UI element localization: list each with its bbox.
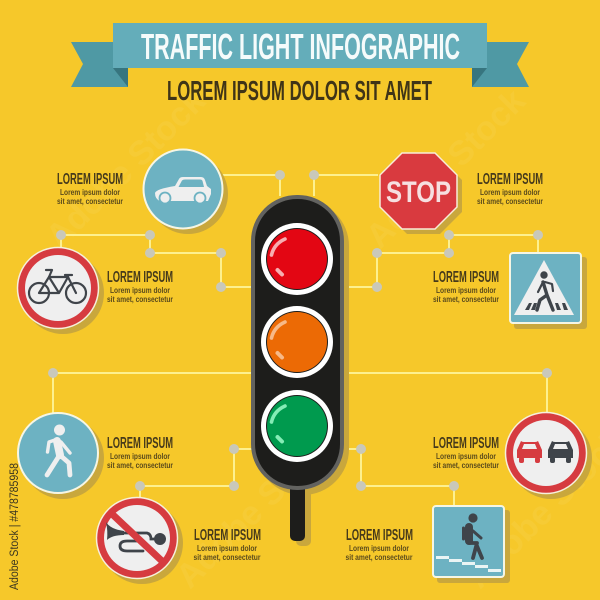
text: bicycle: LOREM IPSUM — [107, 269, 173, 286]
icon: stop sign — [380, 153, 462, 234]
connector lines — [48, 170, 552, 506]
text: car: Lorem ipsum dolor — [60, 188, 120, 197]
green light — [261, 390, 333, 462]
icon: stop sign: STOP — [386, 176, 451, 209]
text: stop — [477, 171, 543, 206]
text: crossing: LOREM IPSUM — [433, 269, 499, 286]
subtitle: LOREM IPSUM DOLOR SIT AMET — [167, 75, 432, 106]
text: car: sit amet, consectetur — [57, 197, 123, 206]
text: overtaking: LOREM IPSUM — [433, 435, 499, 452]
text: Adobe Stock — [359, 82, 533, 256]
text: crossing — [433, 269, 499, 304]
traffic light — [253, 197, 349, 546]
icon: bicycle sign — [18, 248, 104, 334]
text: bicycle: Lorem ipsum dolor — [110, 286, 170, 295]
text: pedestrian: sit amet, consectetur — [107, 461, 173, 470]
text: stairs: sit amet, consectetur — [346, 553, 412, 562]
red light — [261, 223, 333, 295]
icon: pedestrian crossing sign — [510, 253, 587, 329]
text: crossing: Lorem ipsum dolor — [436, 286, 496, 295]
text: pedestrian — [107, 435, 173, 470]
text: Adobe Stock — [39, 82, 213, 256]
text: stop: LOREM IPSUM — [477, 171, 543, 188]
text: bicycle: sit amet, consectetur — [107, 295, 173, 304]
icon: overtaking prohibited sign — [506, 412, 592, 499]
text: stop: Lorem ipsum dolor — [480, 188, 540, 197]
icon: car sign — [144, 150, 228, 234]
text: bicycle — [107, 269, 173, 304]
text: car: LOREM IPSUM — [57, 171, 123, 188]
text: crossing: sit amet, consectetur — [433, 295, 499, 304]
orange light — [261, 306, 333, 378]
icon: underpass stairs sign — [433, 506, 510, 583]
text: no horn — [194, 527, 261, 562]
text: overtaking: Lorem ipsum dolor — [436, 452, 496, 461]
text: overtaking — [433, 435, 499, 470]
text: stairs: Lorem ipsum dolor — [349, 544, 409, 553]
text: pedestrian: LOREM IPSUM — [107, 435, 173, 452]
text: stop: sit amet, consectetur — [477, 197, 543, 206]
text: overtaking: sit amet, consectetur — [433, 461, 499, 470]
text: stairs: LOREM IPSUM — [346, 527, 413, 544]
text: no horn: Lorem ipsum dolor — [197, 544, 257, 553]
text: car — [57, 171, 123, 206]
text: no horn: sit amet, consectetur — [194, 553, 260, 562]
title banner — [71, 23, 529, 87]
text: no horn: LOREM IPSUM — [194, 527, 261, 544]
icon: pedestrian sign — [18, 413, 104, 499]
text: pedestrian: Lorem ipsum dolor — [110, 452, 170, 461]
text: stairs — [346, 527, 413, 562]
text: Adobe Stock — [169, 422, 343, 596]
stock id label: Adobe Stock | #478785958 — [9, 463, 21, 590]
icon: no horn sign — [96, 498, 183, 584]
